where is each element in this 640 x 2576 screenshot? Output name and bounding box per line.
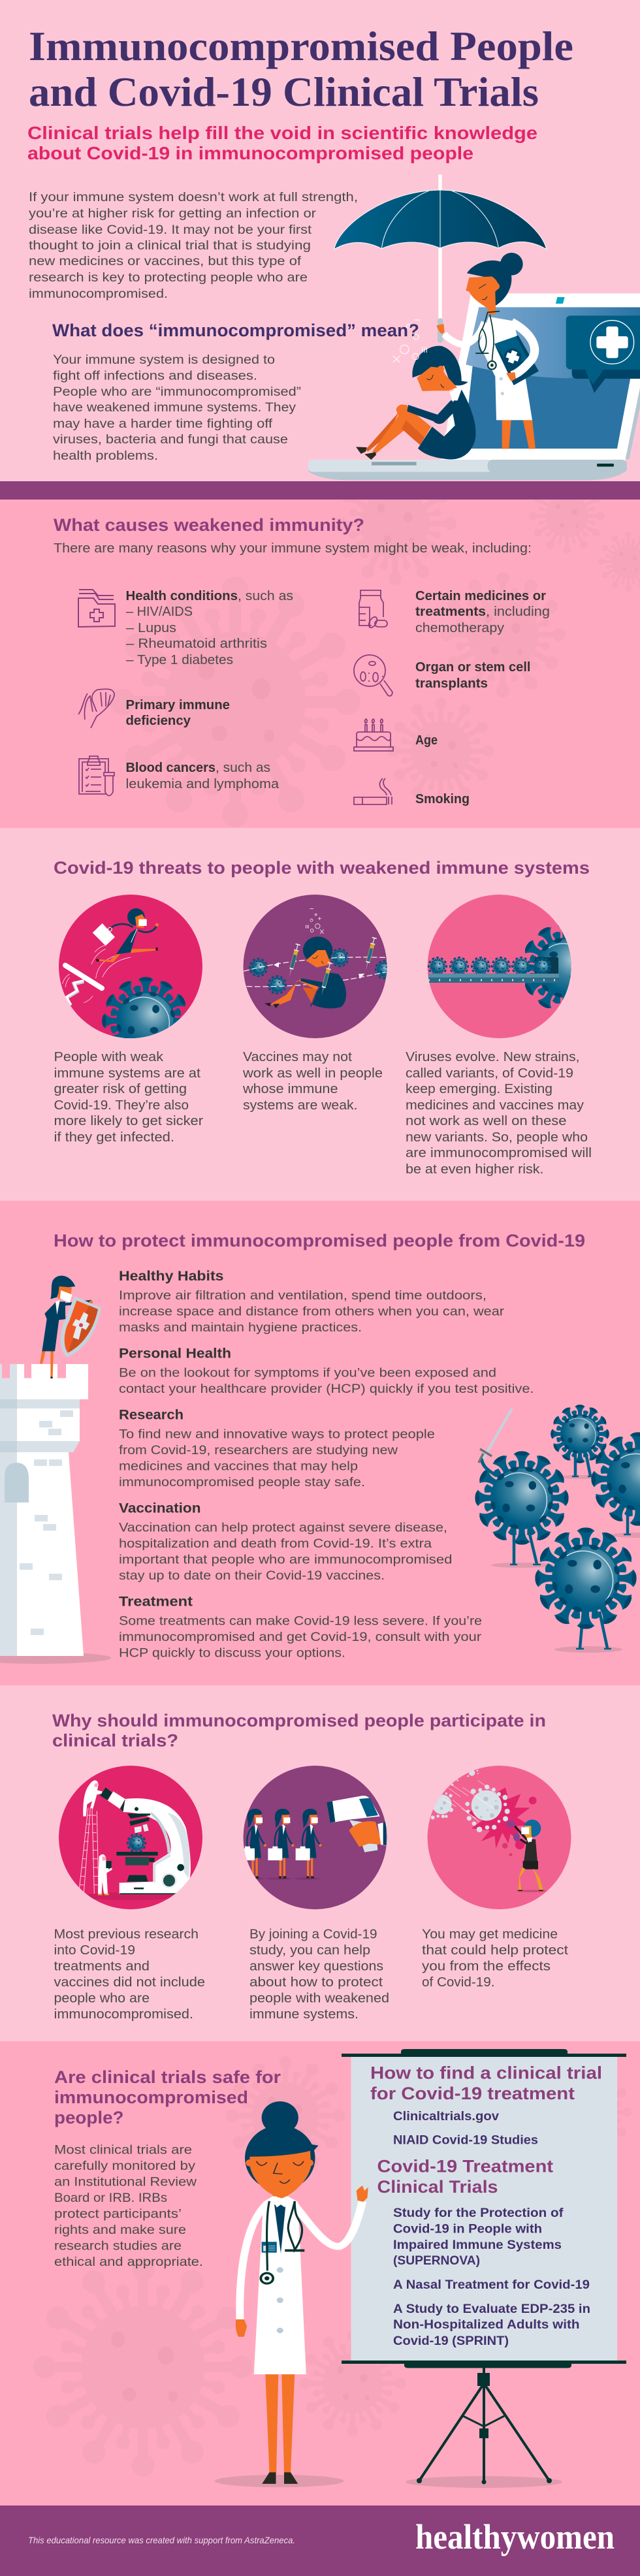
protect item: vaccination: important that people who are immunocompromised <box>119 1553 452 1567</box>
text: join a study: By joining a Covid-19 <box>249 1927 377 1942</box>
protect item: vaccination: Vaccination <box>119 1501 201 1516</box>
text: viruses evolve: Viruses evolve. New strains, <box>406 1049 580 1064</box>
heading: covid threats: Covid-19 threats to people with weakened immune systems <box>54 858 590 878</box>
illustration: runner leaping over virus <box>59 895 202 1038</box>
icon: dizzy symbols <box>393 320 426 362</box>
protect item: treatment: immunocompromised and get Covid-19, consult with your <box>119 1630 482 1644</box>
text: IRB monitoring: ethical and appropriate. <box>54 2255 203 2269</box>
cause: primary immune deficiency <box>125 697 230 728</box>
board list of studies: Study for the Protection of <box>393 2206 564 2220</box>
cause: health conditions: – Rheumatoid arthritis <box>126 636 267 651</box>
protect item: research: from Covid-19, researchers are studying new <box>119 1443 398 1457</box>
text: IRB monitoring: research studies are <box>54 2238 182 2253</box>
board links <box>393 2109 538 2148</box>
text: greater risk: immune systems are at <box>54 1066 200 1081</box>
protect item: personal health: contact your healthcare provider (HCP) quickly if you test positive. <box>119 1382 534 1396</box>
text: may get medicine: you from the effects <box>422 1959 551 1974</box>
protect item: treatment <box>119 1595 482 1660</box>
heading: what causes weakened immunity: What causes weakened immunity? <box>54 515 364 535</box>
text: join a study: immune systems. <box>249 2007 359 2022</box>
cause: blood cancers: Blood cancers <box>125 760 216 775</box>
cause: blood cancers: leukemia and lymphoma <box>125 776 280 791</box>
title: Immunocompromised People <box>29 23 573 69</box>
board list of studies <box>393 2206 590 2348</box>
board heading: treatment clinical trials <box>377 2157 553 2197</box>
board heading: treatment clinical trials: Clinical Trials <box>377 2177 498 2197</box>
panel: causes background <box>0 500 640 828</box>
panel: threats background <box>0 828 640 1201</box>
text: greater risk: greater risk of getting <box>54 1081 187 1096</box>
board list of studies: Covid-19 (SPRINT) <box>393 2334 509 2348</box>
cause: age: Age <box>415 733 438 748</box>
cause: certain medicines: , including <box>486 604 550 619</box>
protect item: research: medicines and vaccines that may help <box>119 1459 358 1473</box>
text: greater risk: more likely to get sicker <box>54 1113 203 1128</box>
text: previous research: Most previous research <box>54 1927 199 1942</box>
cause: blood cancers <box>125 760 280 791</box>
heading: what does immunocompromised mean: What does “immunocompromised” mean? <box>52 321 419 340</box>
title <box>29 23 573 115</box>
protect item: research: Research <box>119 1408 184 1422</box>
definition text: fight off infections and diseases. <box>53 368 257 383</box>
text: join a study <box>249 1927 389 2022</box>
protect item: healthy habits: increase space and distance from others when you can, wear <box>119 1305 505 1319</box>
cause: health conditions: – Type 1 diabetes <box>126 652 233 667</box>
text: vaccines may not work: work as well in people <box>242 1066 383 1081</box>
board heading: treatment clinical trials: Covid-19 Treatment <box>377 2157 553 2176</box>
cause: certain medicines: Certain medicines or <box>415 588 546 603</box>
protect item: personal health: Personal Health <box>119 1346 231 1361</box>
subtitle <box>27 123 537 163</box>
definition text: People who are “immunocompromised” <box>53 385 301 399</box>
protect item: vaccination: hospitalization and death from Covid-19. It’s extra <box>119 1536 432 1551</box>
patient sitting on laptop <box>356 346 475 460</box>
text: viruses evolve: are immunocompromised will <box>406 1145 592 1160</box>
illustration: virus army <box>475 1405 640 1653</box>
text: IRB monitoring: Board or IRB. IRBs <box>54 2191 167 2205</box>
heading: are clinical trials safe: Are clinical trials safe for <box>54 2067 281 2087</box>
text: viruses evolve: keep emerging. Existing <box>406 1081 552 1096</box>
text: may get medicine: that could help protect <box>422 1943 568 1958</box>
board links: Clinicaltrials.gov <box>393 2109 499 2123</box>
subtitle: Clinical trials help fill the void in scientific knowledge <box>27 123 537 143</box>
illustration: vaccines missing patient <box>243 895 394 1038</box>
text: previous research: into Covid-19 <box>54 1943 135 1958</box>
text: viruses evolve: be at even higher risk. <box>406 1162 543 1177</box>
text: viruses evolve: called variants, of Covid-19 <box>406 1066 573 1081</box>
heading: why participate: clinical trials? <box>52 1730 178 1750</box>
board heading: how to find a trial: How to find a clinical trial <box>370 2063 602 2083</box>
footer: This educational resource was created with support from AstraZeneca. <box>28 2535 295 2545</box>
definition text: may have a harder time fighting off <box>53 417 273 431</box>
definition text: Your immune system is designed to <box>53 353 275 367</box>
text: IRB monitoring: Most clinical trials are <box>54 2143 192 2157</box>
definition text <box>53 353 301 463</box>
board list of studies: Non-Hospitalized Adults with <box>393 2317 580 2332</box>
intro text: thought to join a clinical trial that is studying <box>29 238 311 253</box>
text: viruses evolve <box>406 1049 592 1177</box>
text: previous research <box>54 1927 205 2022</box>
text: vaccines may not work <box>242 1049 383 1113</box>
illustration: laptop, umbrella, doctor and patient <box>308 174 640 480</box>
cause: health conditions: – Lupus <box>126 620 176 635</box>
text: viruses evolve: medicines and vaccines may <box>406 1098 584 1113</box>
text: previous research: immunocompromised. <box>54 2007 193 2022</box>
text: previous research: treatments and <box>54 1959 150 1974</box>
virus watermarks: causes section <box>110 462 640 827</box>
heading: are clinical trials safe: immunocompromised <box>54 2088 248 2107</box>
text: IRB monitoring: an Institutional Review <box>54 2174 197 2189</box>
definition text: have weakened immune systems. They <box>53 400 296 415</box>
protect item: vaccination <box>119 1501 452 1583</box>
protect item: vaccination: stay up to date on their Covid-19 vaccines. <box>119 1568 385 1583</box>
causes intro: There are many reasons why your immune system might be weak, including: <box>54 541 532 556</box>
text: IRB monitoring <box>54 2143 203 2269</box>
protect item: research: To find new and innovative ways to protect people <box>119 1427 435 1442</box>
purple divider band <box>0 481 640 500</box>
icon: magnifier <box>354 655 392 696</box>
text: may get medicine: You may get medicine <box>422 1927 558 1942</box>
cause: organ transplants <box>415 660 530 691</box>
icon: umbrella <box>334 174 547 343</box>
text: greater risk: if they get infected. <box>54 1130 174 1145</box>
text: vaccines may not work: whose immune <box>242 1081 338 1096</box>
intro text: new medicines or vaccines, but this type of <box>29 254 302 268</box>
text: join a study: answer key questions <box>249 1959 383 1974</box>
icon: medical folder <box>78 590 115 627</box>
text: join a study: study, you can help <box>249 1943 370 1958</box>
cause: organ transplants: Organ or stem cell <box>415 660 530 675</box>
board links: NIAID Covid-19 Studies <box>393 2133 538 2148</box>
heading: how to protect: How to protect immunocompromised people from Covid-19 <box>54 1231 585 1250</box>
icon: medical chat bubble <box>566 315 640 393</box>
text: vaccines may not work: systems are weak. <box>243 1098 358 1113</box>
protect item: research <box>119 1408 435 1489</box>
cause: health conditions: – HIV/AIDS <box>126 604 193 619</box>
illustration: women in line and thermometer <box>239 1766 387 1909</box>
board list of studies: (SUPERNOVA) <box>393 2253 480 2268</box>
illustration: woman punching virus <box>427 1766 571 1909</box>
text: IRB monitoring: carefully monitored by <box>54 2159 195 2173</box>
protect item: personal health <box>119 1346 534 1396</box>
text: greater risk: Covid-19. They’re also <box>54 1098 189 1113</box>
cause: blood cancers: , such as <box>216 760 270 775</box>
board heading: how to find a trial <box>370 2063 602 2103</box>
protect item: personal health: Be on the lookout for symptoms if you’ve been exposed and <box>119 1366 496 1380</box>
protect item: treatment: Some treatments can make Covid-19 less severe. If you’re <box>119 1614 482 1629</box>
heading: are clinical trials safe: people? <box>54 2108 124 2127</box>
text: previous research: vaccines did not include <box>54 1975 205 1990</box>
illustration: woman with shield <box>40 1276 101 1378</box>
text: greater risk: People with weak <box>54 1049 164 1064</box>
panel: safety background <box>0 2041 640 2505</box>
icon: cigarette <box>354 778 392 804</box>
intro text <box>29 190 358 301</box>
text: join a study: about how to protect <box>249 1975 383 1990</box>
illustration: variants conveyor <box>427 895 571 1038</box>
virus watermarks: safety section <box>33 2056 632 2477</box>
footer: healthywomen <box>415 2517 615 2556</box>
cause: primary immune deficiency: Primary immune <box>125 697 230 712</box>
panel: protect background <box>0 1201 640 1685</box>
cause: certain medicines: chemotherapy <box>415 620 505 635</box>
icon: laptop <box>308 293 640 480</box>
board list of studies: Covid-19 in People with <box>393 2221 542 2236</box>
text: previous research: people who are <box>54 1991 150 2006</box>
panel: why participate background <box>0 1685 640 2041</box>
icon: clipboard and test tube <box>79 756 114 795</box>
cause: health conditions: Health conditions <box>125 588 238 603</box>
board with stand <box>342 2049 626 2488</box>
cause: certain medicines: treatments <box>415 604 486 619</box>
text: join a study: people with weakened <box>249 1991 389 2006</box>
text: greater risk <box>54 1049 203 1145</box>
doctor holding umbrella <box>436 253 539 449</box>
text: viruses evolve: not work as well on these <box>406 1113 567 1128</box>
cause: smoking: Smoking <box>415 791 470 806</box>
definition text: viruses, bacteria and fungi that cause <box>53 432 288 447</box>
protect item: vaccination: Vaccination can help protect against severe disease, <box>119 1520 447 1534</box>
heading: why participate <box>52 1711 546 1750</box>
board list of studies: A Nasal Treatment for Covid-19 <box>393 2278 590 2292</box>
text: viruses evolve: new variants. So, people who <box>406 1130 588 1145</box>
intro text: disease like Covid-19. It may not be your first <box>29 223 312 237</box>
protect item: healthy habits: Healthy Habits <box>119 1269 223 1284</box>
cause: organ transplants: transplants <box>415 676 488 691</box>
board list of studies: A Study to Evaluate EDP-235 in <box>393 2302 590 2316</box>
cause: certain medicines <box>415 588 550 635</box>
intro text: immunocompromised. <box>29 287 168 301</box>
illustration: presenting doctor <box>215 2101 368 2487</box>
text: IRB monitoring: rights and make sure <box>54 2223 186 2237</box>
protect item: healthy habits <box>119 1269 505 1335</box>
panel: hero background <box>0 0 640 481</box>
protect item: research: immunocompromised people stay safe. <box>119 1475 365 1489</box>
text: IRB monitoring: protect participants’ <box>54 2207 182 2221</box>
protect item: treatment: Treatment <box>119 1595 193 1609</box>
icon: medicine bottle <box>359 590 387 629</box>
icon: birthday cake <box>354 719 393 751</box>
board heading: how to find a trial: for Covid-19 treatment <box>370 2084 575 2103</box>
text: may get medicine: of Covid-19. <box>422 1975 495 1990</box>
intro text: research is key to protecting people who are <box>29 270 308 285</box>
protect item: treatment: HCP quickly to discuss your options. <box>119 1646 345 1660</box>
title: and Covid-19 Clinical Trials <box>29 69 539 115</box>
text: vaccines may not work: Vaccines may not <box>243 1049 352 1064</box>
cause: health conditions: , such as <box>238 588 293 603</box>
protect item: healthy habits: Improve air filtration and ventilation, spend time outdoors, <box>119 1288 487 1303</box>
intro text: If your immune system doesn’t work at full strength, <box>29 190 358 204</box>
cause: primary immune deficiency: deficiency <box>125 713 191 728</box>
heading: why participate: Why should immunocompromised people participate in <box>52 1711 546 1730</box>
protect item: healthy habits: masks and maintain hygiene practices. <box>119 1320 362 1335</box>
subtitle: about Covid-19 in immunocompromised people <box>27 143 473 163</box>
intro text: you’re at higher risk for getting an infection or <box>29 206 317 221</box>
cause: health conditions <box>125 588 293 667</box>
icon: hands <box>78 689 114 728</box>
illustration: microscope and scientists <box>59 1766 202 1909</box>
text: may get medicine <box>422 1927 568 1990</box>
illustration: castle tower <box>0 1364 111 1664</box>
board list of studies: Impaired Immune Systems <box>393 2238 562 2252</box>
heading: are clinical trials safe <box>54 2067 281 2127</box>
definition text: health problems. <box>53 449 158 463</box>
footer <box>0 2505 640 2576</box>
